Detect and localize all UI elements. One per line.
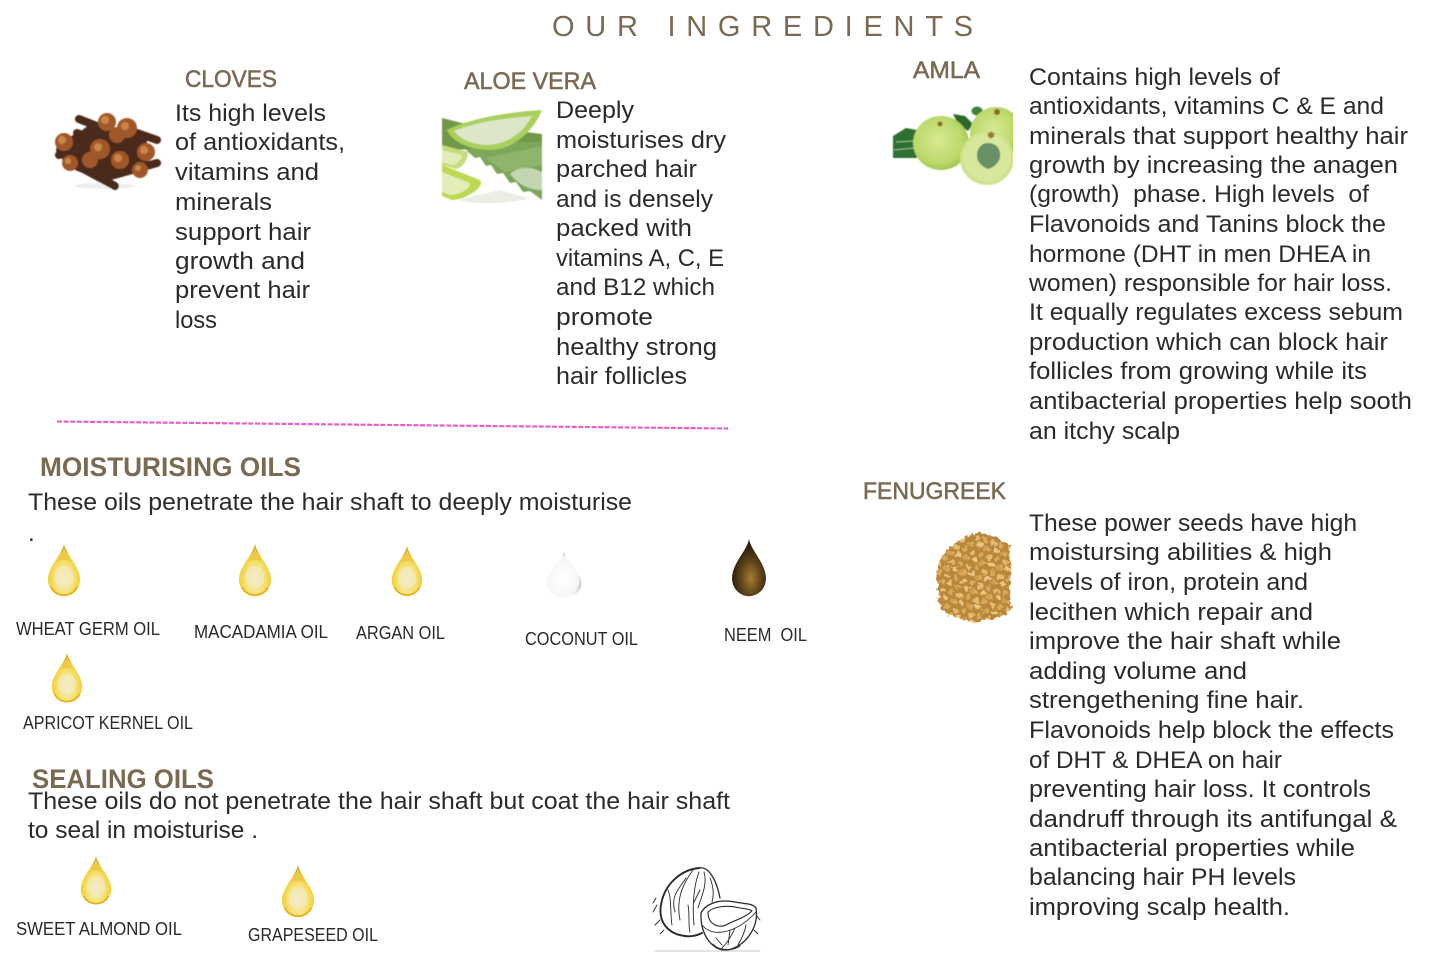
text: fenugreek description: strengethening fine hair. <box>1029 687 1304 714</box>
text: cloves description: vitamins and <box>175 159 319 186</box>
icon: coconut line drawing <box>653 868 760 951</box>
text: fenugreek description: levels of iron, protein and <box>1029 569 1308 596</box>
text: fenugreek description: Flavonoids help block the effects <box>1029 717 1394 744</box>
icon: cloves photo <box>55 113 157 189</box>
text: aloe vera description: parched hair <box>556 156 697 183</box>
text: moisturising oils description <box>28 489 632 547</box>
text: amla description: (growth) phase. High levels of <box>1029 181 1369 208</box>
panel: moisturising oils <box>16 452 807 733</box>
text: aloe vera description: Deeply <box>556 97 634 124</box>
text: cloves description: Its high levels <box>175 100 326 127</box>
text: aloe vera description <box>556 97 726 390</box>
panel: aloe vera <box>442 68 726 390</box>
text: aloe vera description: and B12 which <box>556 274 715 301</box>
text: sealing oils description: These oils do not penetrate the hair shaft but coat the hair shaft <box>28 788 730 815</box>
text: fenugreek description: of DHT & DHEA on hair <box>1029 747 1282 774</box>
text: cloves description <box>175 100 345 334</box>
label: wheat germ oil: WHEAT GERM OIL <box>16 619 160 639</box>
text: aloe vera description: promote <box>556 304 653 331</box>
icon: grapeseed oil drop <box>282 865 314 917</box>
text: amla description: antibacterial properties help sooth <box>1029 388 1412 415</box>
title: OUR INGREDIENTS <box>552 11 973 43</box>
text: fenugreek description <box>1029 510 1397 921</box>
text: amla description: women) responsible for hair loss. <box>1028 270 1392 297</box>
panel: fenugreek <box>863 478 1397 921</box>
text: amla description: production which can block hair <box>1029 329 1388 356</box>
label: coconut oil: COCONUT OIL <box>525 629 638 649</box>
text: amla description: Flavonoids and Tanins block the <box>1029 211 1386 238</box>
text: amla description: minerals that support healthy hair <box>1029 123 1408 150</box>
heading: amla: AMLA <box>913 57 980 84</box>
icon: apricot kernel oil drop <box>52 653 82 702</box>
heading: fenugreek: FENUGREEK <box>863 478 1006 505</box>
icon: sweet almond oil drop <box>81 856 111 904</box>
text: fenugreek description: These power seeds have high <box>1029 510 1357 537</box>
text: aloe vera description: hair follicles <box>556 363 687 390</box>
text: amla description: an itchy scalp <box>1029 418 1180 445</box>
panel: cloves <box>55 66 345 334</box>
heading: moisturising oils: MOISTURISING OILS <box>40 452 301 482</box>
text: amla description: growth by increasing the anagen <box>1029 152 1398 179</box>
text: aloe vera description: packed with <box>556 215 692 242</box>
icon: macadamia oil drop <box>239 544 271 596</box>
text: amla description: antioxidants, vitamins C & E and <box>1029 93 1384 120</box>
heading: cloves: CLOVES <box>185 66 277 93</box>
text: amla description: hormone (DHT in men DHEA in <box>1029 241 1371 268</box>
text: fenugreek description: improve the hair shaft while <box>1029 628 1341 655</box>
text: aloe vera description: vitamins A, C, E <box>556 245 724 272</box>
icon: amla photo <box>893 106 1022 185</box>
text: cloves description: prevent hair <box>175 277 310 304</box>
text: fenugreek description: adding volume and <box>1029 658 1247 685</box>
icon: argan oil drop <box>392 546 422 596</box>
text: aloe vera description: and is densely <box>556 186 713 213</box>
text: sealing oils description: to seal in moisturise . <box>28 817 258 844</box>
text: fenugreek description: improving scalp health. <box>1029 894 1290 921</box>
panel: amla <box>893 57 1412 445</box>
label: neem oil: NEEM OIL <box>724 625 807 645</box>
text: amla description: Contains high levels of <box>1029 64 1280 91</box>
label: macadamia oil: MACADAMIA OIL <box>194 622 328 642</box>
text: aloe vera description: moisturises dry <box>556 127 726 154</box>
label: sweet almond oil: SWEET ALMOND OIL <box>16 919 182 939</box>
text: cloves description: loss <box>175 307 217 334</box>
text: moisturising oils description: . <box>28 520 35 547</box>
text: cloves description: growth and <box>175 248 305 275</box>
heading: aloe vera: ALOE VERA <box>464 68 596 95</box>
text: aloe vera description: healthy strong <box>556 334 717 361</box>
icon: wheat germ oil drop <box>48 544 80 596</box>
text: cloves description: support hair <box>175 219 311 246</box>
text: moisturising oils description: These oils penetrate the hair shaft to deeply moisturise <box>28 489 632 516</box>
text: fenugreek description: moistursing abilities & high <box>1029 539 1332 566</box>
text: amla description <box>1028 64 1412 445</box>
panel: sealing oils <box>16 764 760 951</box>
text: fenugreek description: antibacterial properties while <box>1029 835 1355 862</box>
text: fenugreek description: dandruff through its antifungal & <box>1029 806 1397 833</box>
text: cloves description: of antioxidants, <box>175 129 345 156</box>
icon: aloe vera photo <box>442 110 542 203</box>
text: amla description: It equally regulates excess sebum <box>1029 299 1403 326</box>
label: apricot kernel oil: APRICOT KERNEL OIL <box>23 713 193 733</box>
text: cloves description: minerals <box>175 189 272 216</box>
heading: sealing oils: SEALING OILS <box>32 764 214 794</box>
text: sealing oils description <box>28 788 730 844</box>
label: argan oil: ARGAN OIL <box>356 623 445 643</box>
text: fenugreek description: lecithen which repair and <box>1029 599 1313 626</box>
text: fenugreek description: balancing hair PH levels <box>1029 864 1296 891</box>
icon: coconut oil drop <box>547 552 581 597</box>
text: fenugreek description: preventing hair loss. It controls <box>1029 776 1371 803</box>
icon: fenugreek seeds photo <box>937 532 1011 623</box>
icon: neem oil drop <box>732 539 766 596</box>
label: grapeseed oil: GRAPESEED OIL <box>248 925 378 945</box>
text: amla description: follicles from growing while its <box>1029 358 1367 385</box>
